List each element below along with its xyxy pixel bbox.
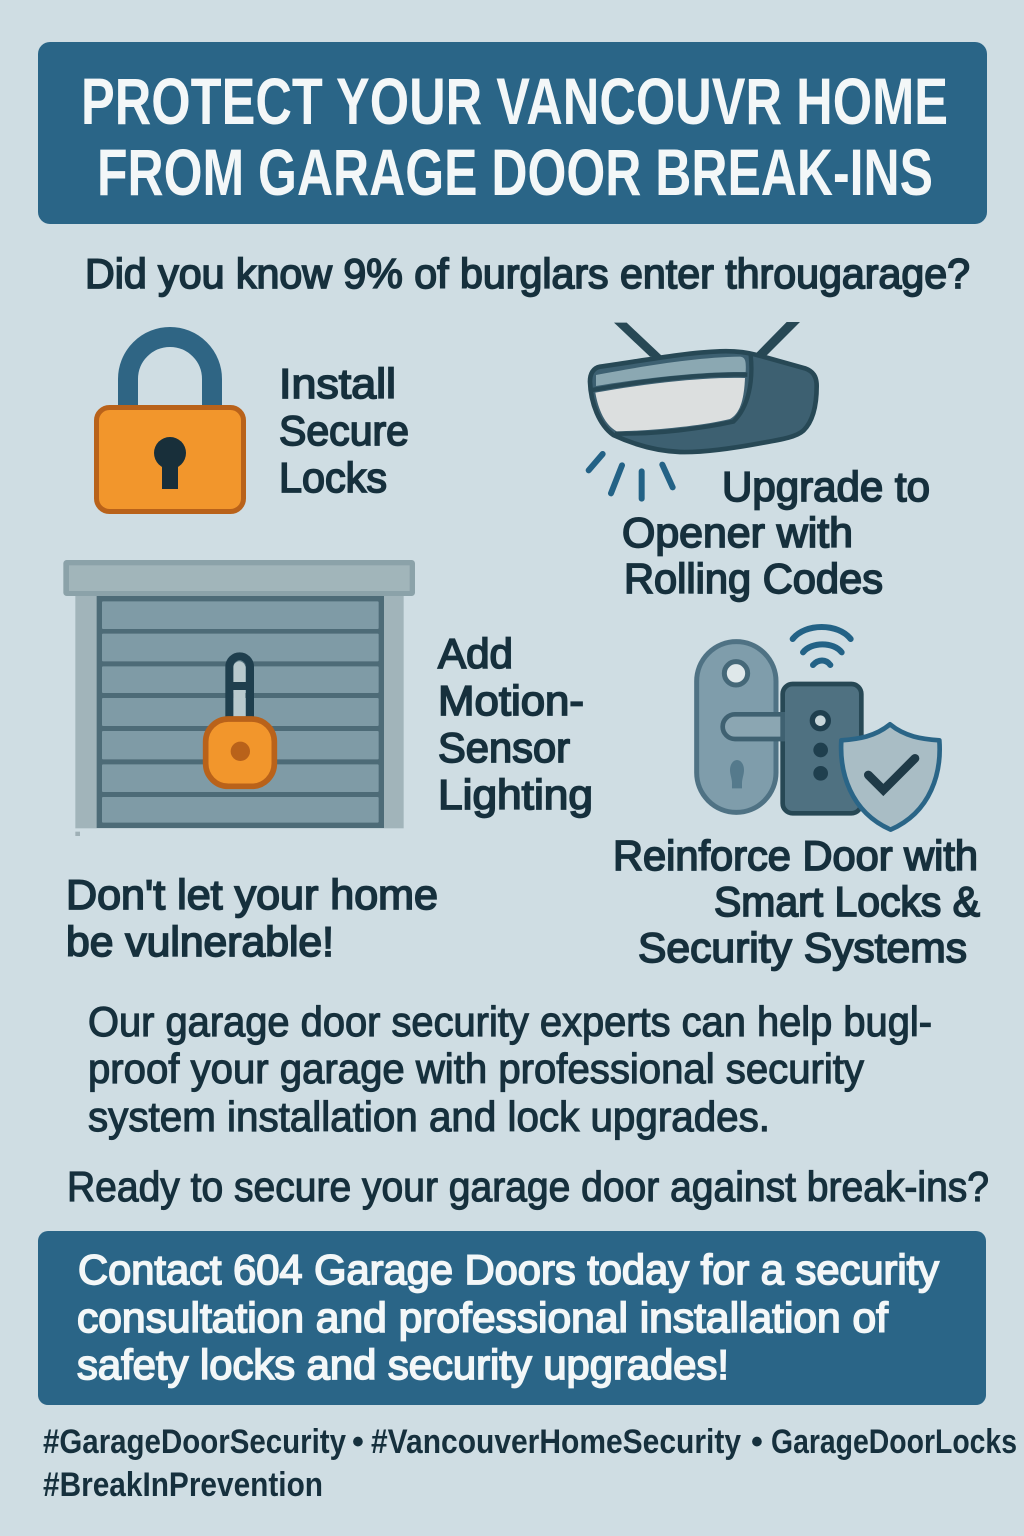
icon: garage door with padlock xyxy=(63,560,415,836)
warning text: be vulnerable! xyxy=(66,918,334,965)
label: install secure locks: Install xyxy=(279,360,396,407)
hashtags: • xyxy=(751,1423,763,1461)
hashtags: #VancouverHomeSecurity xyxy=(371,1423,741,1461)
icon: smart lock with shield xyxy=(697,627,940,830)
hashtags xyxy=(43,1423,1017,1504)
label: motion sensor lighting: Motion- xyxy=(438,677,584,724)
contact banner xyxy=(38,1231,986,1405)
contact banner: safety locks and security upgrades! xyxy=(77,1341,729,1388)
label: motion sensor lighting: Lighting xyxy=(438,771,593,818)
icon: garage door opener xyxy=(589,322,817,499)
title banner xyxy=(38,42,987,224)
icon: padlock xyxy=(96,337,244,512)
label: upgrade opener: Rolling Codes xyxy=(624,555,883,602)
warning text xyxy=(66,871,438,965)
hashtags: • xyxy=(352,1423,364,1461)
warning text: Don't let your home xyxy=(66,871,438,918)
label: upgrade opener: Opener with xyxy=(622,509,853,556)
statistic question: Did you know 9% of burglars enter througarage? xyxy=(85,250,970,297)
contact banner: Contact 604 Garage Doors today for a security xyxy=(78,1246,939,1293)
label: reinforce door xyxy=(613,832,980,971)
experts paragraph: Our garage door security experts can help bugl- xyxy=(88,998,932,1045)
label: motion sensor lighting: Add xyxy=(438,630,513,677)
label: reinforce door: Security Systems xyxy=(638,924,967,971)
label: upgrade opener xyxy=(622,463,930,602)
experts paragraph: proof your garage with professional security xyxy=(88,1045,864,1092)
label: upgrade opener: Upgrade to xyxy=(722,463,930,510)
label: reinforce door: Reinforce Door with xyxy=(613,832,978,879)
contact banner: consultation and professional installation of xyxy=(77,1294,888,1341)
label: reinforce door: Smart Locks & xyxy=(714,878,980,925)
experts paragraph: system installation and lock upgrades. xyxy=(88,1093,770,1140)
label: install secure locks xyxy=(279,360,409,501)
label: motion sensor lighting: Sensor xyxy=(438,724,570,771)
label: motion sensor lighting xyxy=(438,630,593,818)
hashtags: #GarageDoorSecurity xyxy=(43,1423,346,1461)
hashtags: #BreakInPrevention xyxy=(43,1466,323,1504)
label: install secure locks: Secure xyxy=(279,407,409,454)
label: install secure locks: Locks xyxy=(279,454,387,501)
experts paragraph xyxy=(88,998,932,1140)
